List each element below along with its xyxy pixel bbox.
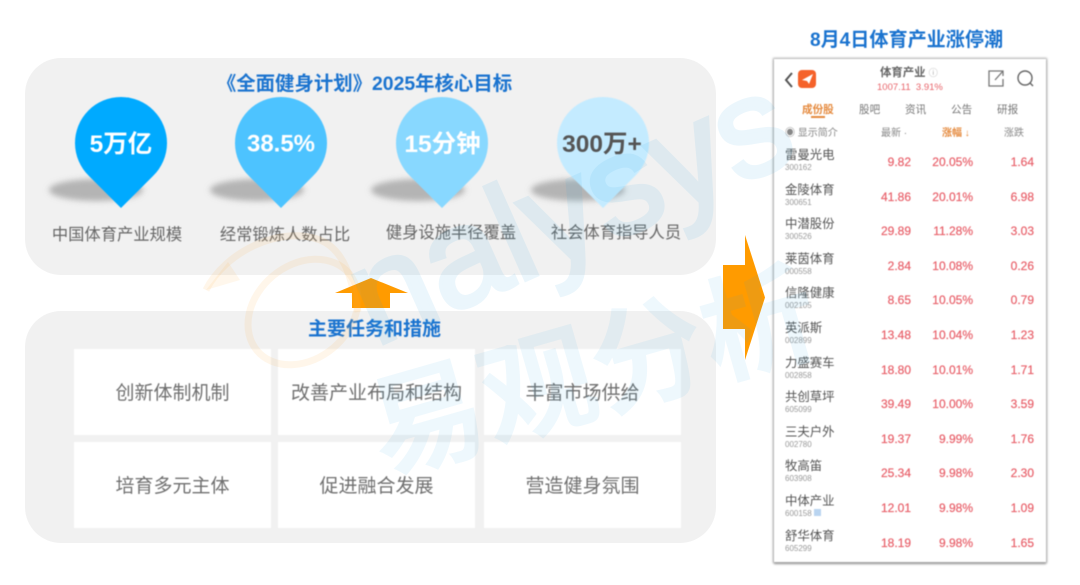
- task: 营造健身氛围: [525, 476, 640, 496]
- row: 18.80: [881, 363, 911, 377]
- active tab underline: [811, 116, 825, 118]
- task: 创新体制机制: [115, 382, 230, 404]
- label: facility radius: 健身设施半径覆盖: [386, 224, 516, 242]
- label: industry scale: 中国体育产业规模: [52, 226, 182, 244]
- row: 300651: [785, 198, 812, 207]
- pin: 300万+: [531, 97, 649, 208]
- row: 9.98%: [939, 536, 973, 550]
- back arrow icon: [784, 69, 817, 89]
- row: 605299: [785, 544, 812, 553]
- row: 1.76: [1011, 432, 1034, 446]
- row: 20.01%: [932, 190, 973, 204]
- label: exercise share: 经常锻炼人数占比: [220, 226, 350, 244]
- header: 涨幅 ↓: [942, 128, 970, 139]
- header: ◉ 显示简介: [785, 128, 838, 139]
- row: 002858: [785, 371, 812, 380]
- tab: 资讯: [905, 104, 926, 116]
- row: 1.09: [1011, 501, 1034, 515]
- heading: limit-up: 8月4日体育产业涨停潮: [810, 30, 1003, 51]
- row: 三夫户外: [785, 425, 835, 439]
- row: 英派斯: [785, 321, 822, 335]
- pin: 38.5%: [210, 97, 327, 208]
- pin: 15分钟: 15分钟: [404, 130, 481, 158]
- stock rows: [784, 148, 1034, 553]
- row: 002780: [785, 440, 812, 449]
- task grid: [74, 349, 681, 528]
- row: 0.79: [1011, 293, 1034, 307]
- task: 促进融合发展: [319, 476, 434, 496]
- row: 000558: [785, 267, 812, 276]
- header: 最新 ·: [881, 128, 907, 139]
- row: 10.05%: [932, 293, 973, 307]
- heading: main tasks: 主要任务和措施: [308, 319, 441, 340]
- tab: 公告: [951, 104, 972, 116]
- row: [785, 216, 1034, 241]
- arrow: right: [723, 235, 765, 360]
- row: 9.82: [888, 155, 911, 169]
- arrow: up: [335, 278, 408, 308]
- label: instructors: 社会体育指导人员: [551, 224, 681, 242]
- header: 涨跌: [1004, 128, 1024, 139]
- row: 9.99%: [939, 432, 973, 446]
- row: 莱茵体育: [785, 252, 835, 266]
- row: 金陵体育: [785, 183, 835, 197]
- pin: 15分钟: [371, 97, 488, 208]
- tabs: [802, 102, 1018, 116]
- pin: 300万+: 300万+: [562, 131, 642, 158]
- task: [278, 442, 475, 528]
- pin: 5万亿: 5万亿: [90, 130, 152, 158]
- row: 20.05%: [932, 155, 973, 169]
- row: 41.86: [881, 190, 911, 204]
- row: 600158: [785, 509, 812, 518]
- row: 300162: [785, 163, 812, 172]
- row: [784, 528, 1034, 553]
- row: 25.34: [881, 466, 911, 480]
- row: 605099: [785, 405, 812, 414]
- row: 10.00%: [932, 397, 973, 411]
- row: [784, 252, 1034, 276]
- row: 3.59: [1011, 397, 1034, 411]
- row: [785, 148, 1034, 172]
- row: 3.03: [1011, 224, 1034, 238]
- pin: 5万亿: [49, 97, 167, 208]
- panel: main tasks: [25, 311, 716, 543]
- row: 18.19: [881, 536, 911, 550]
- row: 19.37: [881, 432, 911, 446]
- row: 6.98: [1011, 190, 1034, 204]
- task: 培育多元主体: [115, 476, 230, 496]
- table header: [785, 126, 1024, 139]
- task: [278, 349, 475, 435]
- tab active: 成份股: [802, 104, 834, 116]
- row: 002899: [785, 336, 812, 345]
- row: [785, 182, 1034, 207]
- row: 雷曼光电: [785, 148, 835, 162]
- row: 共创草坪: [785, 390, 835, 404]
- row: 中体产业: [785, 494, 835, 508]
- tab: 股吧: [859, 104, 880, 116]
- task: [74, 442, 271, 528]
- row: [784, 286, 1034, 310]
- task: [484, 349, 681, 435]
- row: 11.28%: [933, 224, 973, 238]
- task: 改善产业布局和结构: [291, 382, 462, 404]
- row: [784, 390, 1034, 414]
- row: 9.98%: [939, 501, 973, 515]
- row: 10.01%: [932, 363, 973, 377]
- row: 9.98%: [939, 466, 973, 480]
- task: 丰富市场供给: [525, 382, 640, 404]
- row: 1.71: [1011, 363, 1034, 377]
- sector index: 1007.11 3.91%: [877, 82, 943, 93]
- row: 0.26: [1011, 259, 1034, 273]
- row: 2.84: [888, 259, 911, 273]
- row: 10.08%: [932, 259, 973, 273]
- row: 信隆健康: [785, 286, 835, 300]
- watermark: 易观分析: [355, 248, 832, 498]
- row: 1.23: [1011, 328, 1034, 342]
- row: 13.48: [881, 328, 911, 342]
- row: 29.89: [881, 224, 911, 238]
- row: 2.30: [1011, 466, 1034, 480]
- heading: core targets: 《全面健身计划》2025年核心目标: [217, 73, 512, 95]
- row: [784, 320, 1034, 345]
- row: 1.65: [1011, 536, 1034, 550]
- row: 中潜股份: [785, 217, 835, 231]
- row: 300526: [785, 232, 812, 241]
- share and search icons: [988, 70, 1034, 88]
- app screenshot: [774, 59, 1046, 562]
- row: 8.65: [888, 293, 911, 307]
- row: 力盛赛车: [785, 356, 835, 370]
- map pin targets: [47, 96, 650, 208]
- row: 002105: [785, 301, 812, 310]
- row: 1.64: [1011, 155, 1034, 169]
- pin: 38.5%: 38.5%: [247, 130, 315, 158]
- row: 10.04%: [932, 328, 973, 342]
- row: [784, 458, 1034, 483]
- task: [74, 349, 271, 435]
- sector title: 体育产业 ⓘ: [880, 67, 938, 79]
- row: 舒华体育: [785, 529, 835, 543]
- watermark: nalysys: [323, 41, 814, 374]
- task: [484, 442, 681, 528]
- row: [784, 356, 1034, 380]
- row: 39.49: [881, 397, 911, 411]
- row: 603908: [785, 474, 812, 483]
- row: 牧高笛: [785, 459, 822, 473]
- row: 12.01: [881, 501, 911, 515]
- row: [784, 424, 1034, 449]
- tab: 研报: [997, 104, 1018, 116]
- row: [784, 494, 1034, 518]
- panel: core targets: [25, 58, 716, 275]
